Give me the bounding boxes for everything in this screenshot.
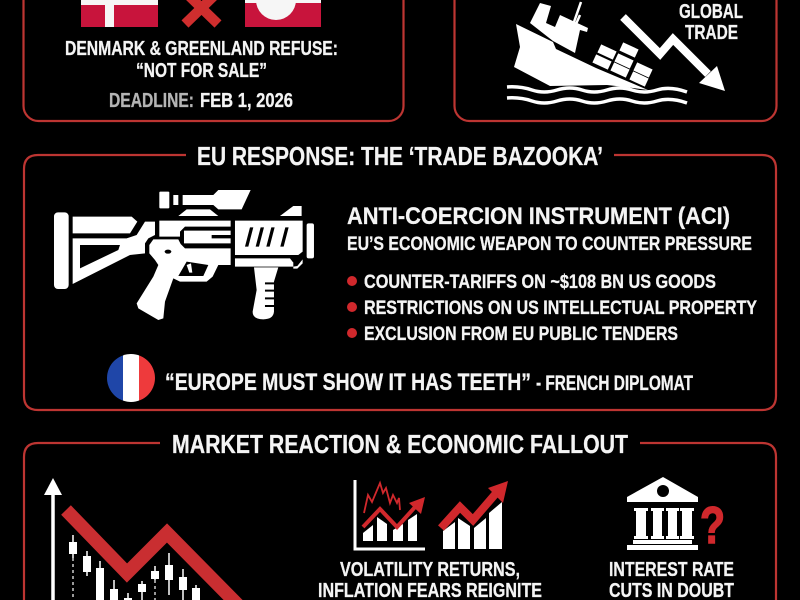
text: refusal statement: DENMARK & GREENLAND REFUSE: [65, 38, 338, 60]
text: deadline: DEADLINE: [109, 90, 194, 112]
panel: market reaction [24, 429, 776, 600]
panel: EU response [24, 141, 776, 410]
chart: falling candlesticks [44, 478, 240, 600]
panel: Denmark and Greenland refuse [24, 0, 404, 121]
icon: central bank with question mark: ? [700, 497, 725, 555]
list: EU measures: EXCLUSION FROM EU PUBLIC TENDERS [364, 323, 678, 345]
icon: France flag [107, 354, 155, 402]
icon: sinking cargo ship [514, 2, 653, 90]
text: ACI heading [347, 203, 752, 255]
text: French diplomat quote: - FRENCH DIPLOMAT [536, 372, 693, 395]
text: deadline [109, 90, 293, 112]
text: refusal statement [65, 38, 338, 82]
icon: Greenland flag [245, 0, 321, 27]
icon: Denmark flag [81, 0, 158, 27]
text: interest rate cuts: INTEREST RATE [609, 558, 734, 581]
icon: volatility charts [355, 480, 508, 549]
text: global trade: GLOBAL [679, 1, 743, 23]
text: ACI heading: ANTI-COERCION INSTRUMENT (ACI) [347, 203, 730, 230]
text: volatility returns [318, 558, 542, 600]
heading: market reaction: MARKET REACTION & ECONOMIC FALLOUT [172, 429, 628, 459]
icon: central bank with question mark [627, 477, 725, 555]
list: EU measures: COUNTER-TARIFFS ON ~$108 BN US GOODS [364, 271, 716, 293]
heading: EU response: EU RESPONSE: THE ‘TRADE BAZOOKA’ [197, 141, 603, 171]
arrow: falling trade [623, 17, 725, 91]
icon: waves [507, 87, 687, 103]
panel: global trade [454, 0, 776, 121]
text: global trade [679, 1, 743, 44]
text: interest rate cuts [609, 558, 734, 600]
text: global trade: TRADE [685, 22, 738, 44]
text: French diplomat quote: “EUROPE MUST SHOW IT HAS TEETH” [165, 369, 531, 396]
text: refusal statement: “NOT FOR SALE” [136, 60, 267, 82]
icon: red cross [185, 0, 218, 24]
list: EU measures [347, 271, 757, 345]
icon: bazooka [54, 190, 314, 320]
text: volatility returns: VOLATILITY RETURNS, [340, 558, 520, 581]
text: deadline: FEB 1, 2026 [200, 90, 293, 112]
